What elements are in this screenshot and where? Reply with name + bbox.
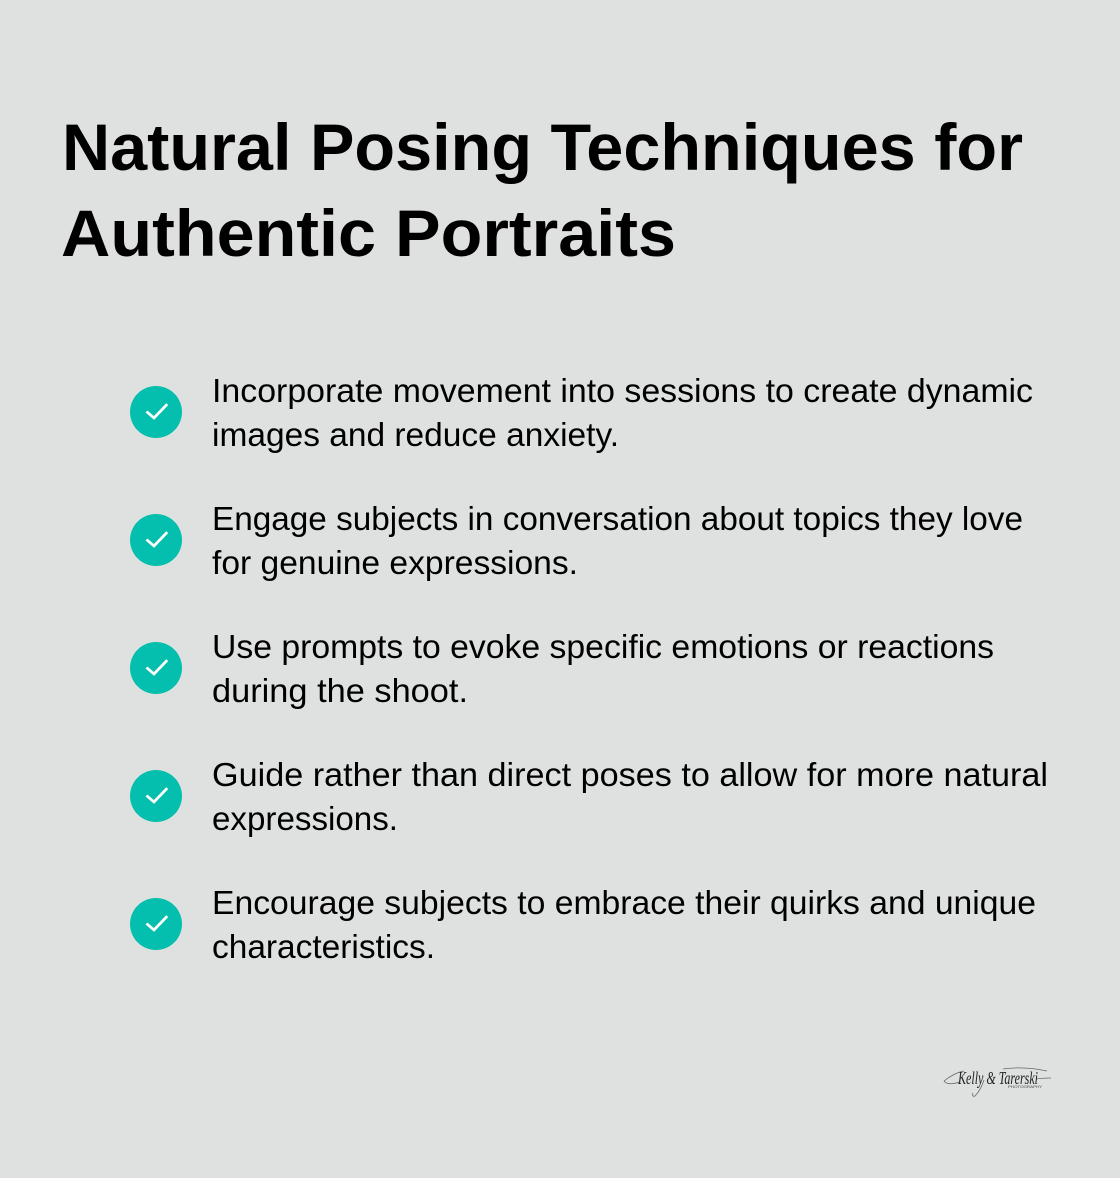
logo: signature: Kelly & Tarerski	[957, 1068, 1038, 1088]
item 5 text: Encourage subjects to embrace their quirks and unique	[212, 884, 1036, 921]
item 1 text: images and reduce anxiety.	[212, 416, 619, 453]
icon: check circle	[130, 770, 182, 822]
item 2: conversation	[130, 500, 1023, 581]
item 3 text: Use prompts to evoke specific emotions or reactions	[212, 628, 994, 665]
item 4: guide poses	[130, 756, 1048, 837]
icon: check circle	[130, 642, 182, 694]
item 3 text: during the shoot.	[212, 672, 468, 709]
item 2 text: Engage subjects in conversation about topics they love	[212, 500, 1023, 537]
item 5 text: characteristics.	[212, 928, 435, 965]
checklist	[130, 372, 1048, 965]
logo: signature	[944, 1068, 1051, 1096]
item 1 text: Incorporate movement into sessions to create dynamic	[212, 372, 1033, 409]
title: Natural Posing Techniques for	[62, 110, 1023, 184]
item 3: prompts	[130, 628, 994, 709]
item 5: quirks	[130, 884, 1036, 965]
item 4 text: Guide rather than direct poses to allow for more natural	[212, 756, 1048, 793]
logo: signature: PHOTOGRAPHY	[1008, 1085, 1043, 1089]
title	[61, 110, 1023, 270]
item 1: movement	[130, 372, 1033, 453]
icon: check circle	[130, 386, 182, 438]
item 4 text	[212, 756, 1048, 837]
item 3 text	[212, 628, 994, 709]
title: Authentic Portraits	[61, 196, 676, 270]
item 2 text: for genuine expressions.	[212, 544, 578, 581]
icon: check circle	[130, 898, 182, 950]
item 1 text	[212, 372, 1033, 453]
item 5 text	[212, 884, 1036, 965]
item 4 text: expressions.	[212, 800, 398, 837]
item 2 text	[212, 500, 1023, 581]
icon: check circle	[130, 514, 182, 566]
